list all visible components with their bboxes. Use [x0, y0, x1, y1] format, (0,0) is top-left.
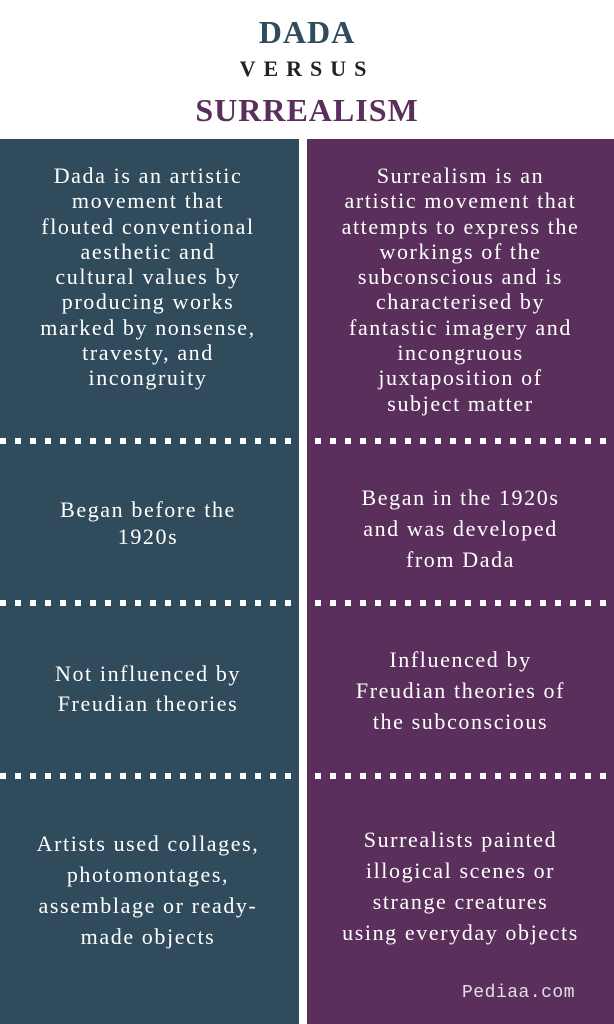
divider 3 — [0, 773, 614, 779]
text: dada definition: aesthetic and — [80, 239, 216, 264]
text: surrealism definition: juxtaposition of — [378, 365, 543, 390]
text: surrealism definition: characterised by — [376, 289, 545, 314]
text: dada definition: cultural values by — [55, 264, 241, 289]
text: dada definition: producing works — [62, 289, 234, 314]
text: surrealism techniques: Surrealists painted — [364, 827, 557, 852]
text: surrealism definition: fantastic imagery and — [349, 315, 572, 340]
text: surrealism freud — [356, 647, 565, 734]
text: surrealism techniques — [342, 827, 579, 945]
text: dada techniques: photomontages, — [67, 862, 229, 887]
text: surrealism freud: Freudian theories of — [356, 678, 565, 703]
text: dada freud — [55, 661, 241, 716]
text: dada timeline — [60, 497, 236, 549]
text: surrealism definition: attempts to express the — [342, 214, 579, 239]
text: surrealism freud: Influenced by — [389, 647, 532, 672]
divider 2 — [0, 600, 614, 606]
text: surrealism definition: subconscious and is — [358, 264, 563, 289]
logo: Pediaa.com: Pediaa.com — [462, 983, 575, 1003]
panel: Dada column — [0, 139, 299, 1024]
text: dada definition: travesty, and — [82, 340, 214, 365]
text: dada definition: incongruity — [88, 365, 208, 390]
text: surrealism definition: Surrealism is an — [377, 163, 544, 188]
text: dada definition: flouted conventional — [41, 214, 255, 239]
text: surrealism timeline: from Dada — [406, 547, 515, 572]
text: dada definition — [40, 163, 256, 390]
text: dada definition: marked by nonsense, — [40, 315, 256, 340]
subtitle: VERSUS: VERSUS — [240, 56, 374, 81]
text: surrealism timeline: Began in the 1920s — [361, 485, 560, 510]
text: dada definition: Dada is an artistic — [54, 163, 242, 188]
text: dada techniques: assemblage or ready- — [39, 893, 257, 918]
divider 1 — [0, 438, 614, 444]
panel: Surrealism column — [307, 139, 614, 1024]
text: dada timeline: Began before the — [60, 497, 236, 522]
text: surrealism techniques: illogical scenes or — [366, 858, 555, 883]
text: surrealism techniques: strange creatures — [373, 889, 548, 914]
text: surrealism freud: the subconscious — [373, 709, 548, 734]
text: dada freud: Not influenced by — [55, 661, 241, 686]
title: SURREALISM: SURREALISM — [195, 92, 419, 128]
text: dada definition: movement that — [72, 188, 224, 213]
text: dada techniques: Artists used collages, — [37, 831, 259, 856]
text: dada techniques: made objects — [81, 924, 215, 949]
text: surrealism techniques: using everyday objects — [342, 920, 579, 945]
text: dada techniques — [36, 831, 259, 949]
text: dada freud: Freudian theories — [58, 691, 238, 716]
title: DADA: DADA — [259, 14, 355, 50]
text: surrealism definition: artistic movement that — [345, 188, 576, 213]
text: surrealism definition — [342, 163, 579, 416]
text: surrealism timeline — [361, 485, 560, 572]
text: surrealism definition: incongruous — [397, 340, 524, 365]
text: surrealism definition: subject matter — [387, 391, 534, 416]
text: dada timeline: 1920s — [118, 524, 178, 549]
text: surrealism definition: workings of the — [379, 239, 542, 264]
text: surrealism timeline: and was developed — [363, 516, 558, 541]
